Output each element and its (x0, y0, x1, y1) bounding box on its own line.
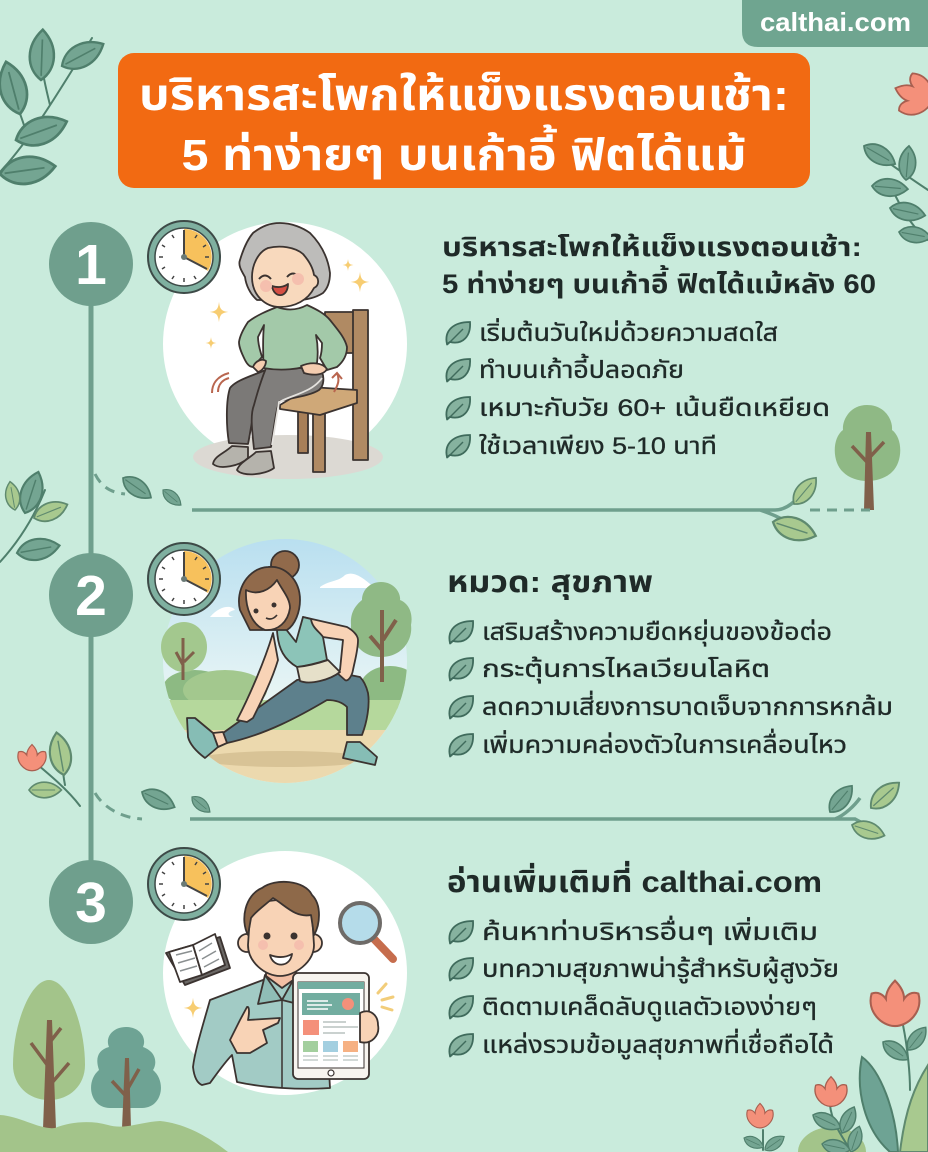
sweater (239, 305, 347, 370)
list 3: บทความสุขภาพน่ารู้สำหรับผู้สูงวัย (482, 955, 839, 984)
leggings (223, 673, 369, 743)
hair and head (271, 551, 299, 579)
step 2 number (49, 553, 133, 637)
decoration: left middle branch (0, 469, 71, 563)
step 2 number: 2 (75, 564, 107, 628)
list 3: ติดตามเคล็ดลับดูแลตัวเองง่ายๆ (482, 993, 817, 1022)
hands (253, 360, 266, 372)
illustration: woman stretching (161, 539, 420, 790)
list 2: เสริมสร้างความยืดหยุ่นของข้อต่อ (482, 618, 832, 647)
step 3 number: 3 (75, 871, 107, 935)
decoration: right tree (835, 405, 900, 510)
motion marks (212, 373, 342, 393)
site tag (742, 0, 928, 47)
site tag: calthai.com (760, 7, 911, 37)
decoration: top-right flower and leaves (860, 69, 928, 245)
tablet (293, 973, 369, 1079)
neck and head (266, 960, 296, 988)
list 3: แหล่งรวมข้อมูลสุขภาพที่เชื่อถือได้ (482, 1028, 834, 1060)
top (277, 617, 327, 667)
divider 1 (95, 471, 870, 546)
title: บริหารสะโพกให้แข็งแรงตอนเช้า: (139, 71, 789, 120)
trees (161, 582, 412, 682)
magnifier (340, 903, 393, 959)
title (118, 53, 810, 188)
list 3 (449, 915, 839, 1060)
list 1: เริ่มต้นวันใหม่ด้วยความสดใส (479, 317, 778, 347)
list 1: เหมาะกับวัย 60+ เน้นยืดเหยียด (479, 395, 830, 422)
list 2: เพิ่มความคล่องตัวในการเคลื่อนไหว (482, 728, 847, 759)
shoes (213, 446, 248, 467)
hair (239, 223, 330, 300)
step 1 number: 1 (75, 233, 107, 297)
step 3 number (49, 860, 133, 944)
scenery: bottom-right flowers and leaves (742, 981, 928, 1152)
list 1 (446, 317, 830, 460)
heading 2: หมวด: สุขภาพ (447, 566, 653, 600)
list 2: ลดความเสี่ยงการบาดเจ็บจากการหกล้ม (482, 690, 893, 721)
shirt (193, 975, 330, 1089)
decoration: left flower (18, 731, 80, 806)
step 1 number (49, 222, 133, 306)
arms (237, 633, 278, 722)
list 3: ค้นหาท่าบริหารอื่นๆ เพิ่มเติม (482, 915, 818, 946)
icon: clock 3 (148, 848, 220, 920)
icon: clock 2 (148, 543, 220, 615)
chair (280, 310, 368, 472)
illustration: man with tablet (163, 851, 407, 1095)
scenery: bottom-left trees and hill (0, 980, 228, 1152)
shoes (187, 718, 218, 758)
heading 1: บริหารสะโพกให้แข็งแรงตอนเช้า: (442, 232, 862, 262)
timeline line (88, 264, 94, 902)
pointing hand (230, 1007, 280, 1053)
divider 2 (95, 776, 905, 843)
list 2 (449, 618, 893, 759)
heading 1: 5 ท่าง่ายๆ บนเก้าอี้ ฟิตได้แม้หลัง 60 (442, 265, 876, 299)
list 2: กระตุ้นการไหลเวียนโลหิต (482, 656, 770, 684)
sparkle and rays (184, 998, 202, 1018)
sparkles (210, 302, 228, 322)
list 1: ใช้เวลาเพียง 5-10 นาที (479, 433, 717, 460)
holding hand (360, 1011, 378, 1043)
decoration: top-left branch (0, 29, 109, 187)
illustration: woman on chair (163, 222, 407, 479)
face (252, 247, 318, 307)
heading 3: อ่านเพิ่มเติมที่ calthai.com (447, 860, 822, 899)
icon: clock 1 (148, 221, 220, 293)
title: 5 ท่าง่ายๆ บนเก้าอี้ ฟิตได้แม้ (182, 124, 746, 180)
book (166, 934, 230, 985)
heading 1 (442, 232, 876, 299)
list 1: ทำบนเก้าอี้ปลอดภัย (479, 353, 684, 384)
trousers (227, 368, 323, 449)
